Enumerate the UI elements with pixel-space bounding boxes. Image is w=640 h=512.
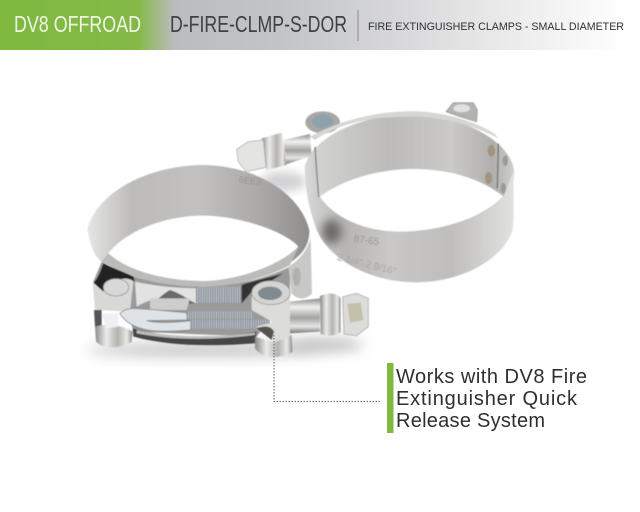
chrome inner band	[93, 262, 290, 345]
callout	[387, 363, 587, 433]
far bolt	[237, 111, 340, 172]
photo: rear clamp: 2 1/4"-2 9/16"	[336, 252, 398, 278]
part number: D-FIRE-CLMP-S-DOR	[170, 11, 347, 37]
strap end	[288, 238, 312, 298]
photo: front clamp	[87, 165, 368, 357]
trunnion	[252, 281, 293, 357]
callout text	[396, 366, 587, 432]
green callout bar	[387, 363, 394, 433]
far lug	[446, 103, 477, 122]
callout leader line	[274, 335, 380, 402]
threaded rod and collar	[290, 293, 341, 335]
band interior	[305, 114, 514, 233]
left saddle	[93, 279, 133, 347]
callout text: Works with DV8 Fire	[396, 366, 587, 388]
band exterior	[305, 147, 514, 282]
front rim	[102, 247, 298, 287]
brand name: DV8 OFFROAD	[14, 11, 141, 37]
callout text: Release System	[396, 410, 545, 432]
photo: rear clamp	[237, 103, 514, 282]
stamped band text: 87-65	[353, 234, 380, 248]
product name: FIRE EXTINGUISHER CLAMPS - SMALL DIAMETER	[368, 21, 624, 33]
band interior	[87, 165, 309, 287]
stamped band text: 6EE3	[238, 175, 262, 187]
band opening	[108, 216, 298, 281]
callout text: Extinguisher Quick	[396, 388, 578, 410]
header banner	[0, 0, 640, 50]
band opening	[320, 169, 503, 232]
bolt	[120, 309, 270, 331]
lock nut	[343, 293, 368, 336]
